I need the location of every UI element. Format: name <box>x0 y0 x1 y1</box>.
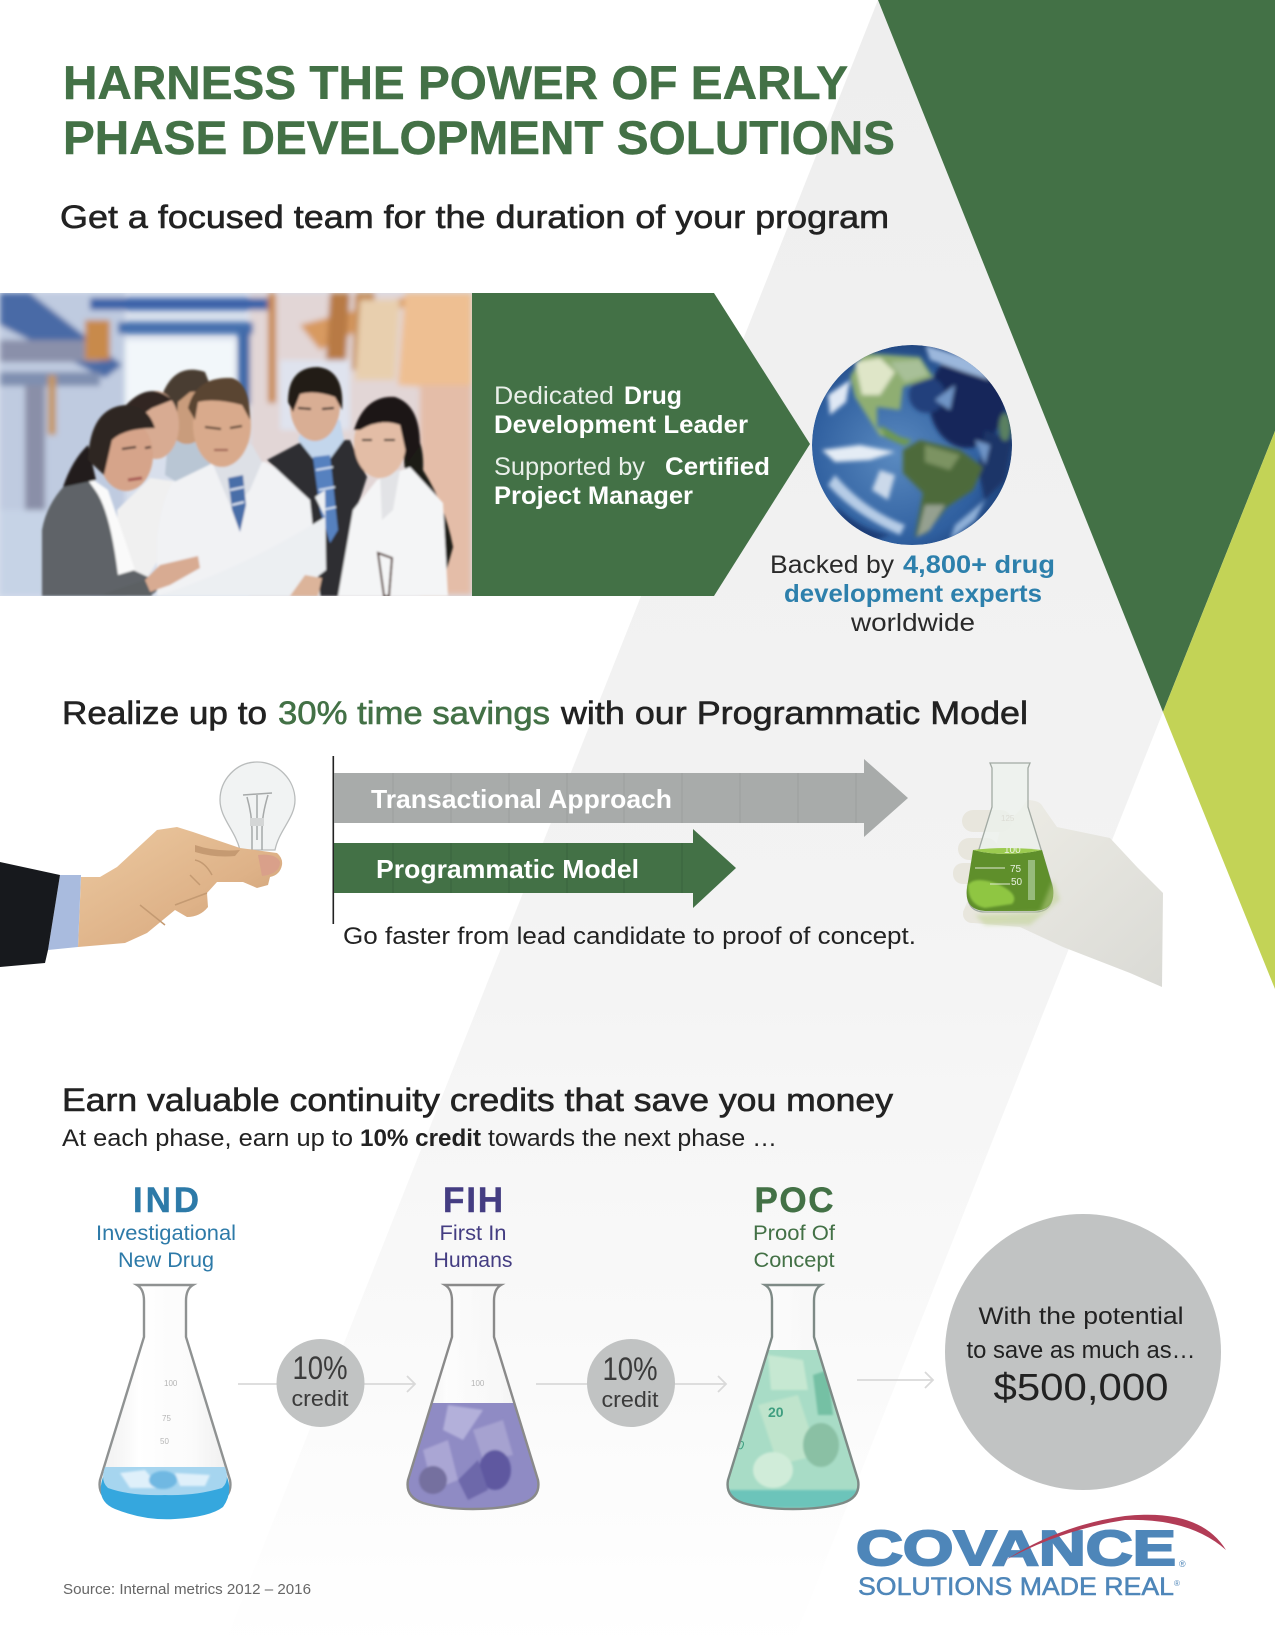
label: FIH: Humans <box>434 1249 512 1272</box>
flask markings: 100 <box>1004 845 1021 856</box>
badge: 10% credit: credit <box>292 1386 348 1411</box>
label: FIH: FIH <box>443 1181 503 1220</box>
heading: time savings: 30% time savings <box>278 695 550 731</box>
flask: POC teal: 20 <box>768 1404 784 1420</box>
arrow: FIH to POC <box>536 1376 726 1392</box>
flask: FIH purple: 100 <box>471 1379 485 1388</box>
green arrow shape <box>472 293 810 596</box>
logo: Covance: COVANCE <box>856 1522 1176 1576</box>
flask: FIH purple <box>403 1285 543 1509</box>
woman in gray suit <box>42 405 165 596</box>
label: FIH <box>434 1181 512 1272</box>
suit sleeve <box>0 862 60 967</box>
label: IND <box>96 1181 236 1272</box>
subheading: earn up to 10%: 10% credit <box>360 1125 481 1152</box>
callout: potential savings circle: $500,000 <box>994 1367 1168 1409</box>
callout: potential savings circle: With the potential <box>978 1303 1184 1330</box>
arrow: transactional approach <box>334 759 908 837</box>
subheading: earn up to 10% <box>62 1125 777 1152</box>
sleeve <box>142 579 152 596</box>
heading: continuity credits: Earn valuable continuity credits that save you money <box>62 1082 893 1118</box>
green glow on glove <box>975 880 1060 925</box>
logo: Covance: ® <box>1174 1579 1180 1588</box>
man in dark suit <box>267 367 367 596</box>
label: IND: Investigational <box>96 1222 236 1245</box>
flask: IND blue: 100 <box>164 1379 178 1388</box>
flask: POC teal <box>723 1285 863 1509</box>
caption: backed by experts: worldwide <box>850 609 975 637</box>
flask neck and body <box>967 763 1053 912</box>
badge: 10% credit: credit <box>602 1387 658 1412</box>
badge: 10% credit: 10% <box>602 1351 658 1387</box>
blueprint paper <box>311 489 328 578</box>
badge: 10% credit <box>587 1339 675 1427</box>
title <box>63 56 895 164</box>
flask markings <box>975 814 1023 888</box>
logo: Covance: SOLUTIONS MADE REAL <box>858 1573 1174 1601</box>
title: PHASE DEVELOPMENT SOLUTIONS <box>63 111 895 164</box>
label: FIH: First In <box>440 1222 506 1245</box>
arrow: POC to savings <box>857 1372 933 1388</box>
thumb nail <box>258 855 280 876</box>
label: POC <box>753 1181 835 1272</box>
image: gloved hand holding flask <box>953 763 1163 987</box>
caption: backed by experts: development experts <box>784 580 1042 608</box>
timeline axis <box>332 756 334 924</box>
man behind <box>162 370 212 490</box>
text: supported by certified project manager: Project Manager <box>494 482 693 510</box>
glove back of hand <box>963 800 1163 987</box>
callout: potential savings circle <box>945 1214 1221 1490</box>
caption: go faster: Go faster from lead candidate to proof of concept. <box>343 923 916 950</box>
thumb shadow <box>195 845 240 856</box>
green liquid <box>967 850 1053 911</box>
logo: Covance <box>856 1515 1226 1601</box>
flask markings: 75 <box>1010 864 1022 875</box>
badge: 10% credit <box>276 1339 364 1427</box>
callout: potential savings circle: to save as much as… <box>966 1337 1196 1364</box>
text: dedicated drug development leader: Drug <box>624 382 682 410</box>
title: HARNESS THE POWER OF EARLY <box>63 56 848 109</box>
hand creases <box>140 860 212 925</box>
heading: time savings <box>62 695 1028 731</box>
hand <box>78 827 282 947</box>
hand on paper <box>143 556 200 592</box>
source note: Source: Internal metrics 2012 – 2016 <box>63 1582 311 1598</box>
text: dedicated drug development leader: Dedicated <box>494 382 614 410</box>
woman behind <box>117 391 180 596</box>
heading: time savings: with our Programmatic Model <box>560 695 1028 731</box>
flask: IND blue: 50 <box>160 1437 169 1446</box>
label: POC: Proof Of <box>753 1222 835 1245</box>
logo: Covance: ® <box>1179 1559 1186 1569</box>
text: supported by certified project manager <box>494 453 770 510</box>
label: IND: IND <box>133 1181 199 1220</box>
text: dedicated drug development leader <box>494 382 748 439</box>
flask markings: 125 <box>1001 814 1015 823</box>
background: light gray diagonal band <box>222 0 1163 1650</box>
background: dark green triangle <box>878 0 1275 712</box>
arrow: programmatic model: Programmatic Model <box>376 854 639 884</box>
text: supported by certified project manager: Supported by <box>494 453 646 481</box>
caption: backed by experts: Backed by <box>770 551 895 579</box>
icon: earth globe <box>812 345 1012 545</box>
badge: 10% credit: 10% <box>292 1350 348 1386</box>
heading: time savings: Realize up to <box>62 695 267 731</box>
shirt cuff <box>48 875 81 950</box>
label: IND: New Drug <box>118 1249 214 1272</box>
fingers behind flask <box>953 810 1012 923</box>
flask: IND blue: 75 <box>162 1414 171 1423</box>
flask: POC teal: 00 <box>729 1435 747 1453</box>
panel: green arrow with team description <box>472 293 810 596</box>
image: hand holding light bulb <box>0 762 295 967</box>
arrow: transactional approach: Transactional Approach <box>371 784 672 814</box>
background: lime triangle <box>1163 431 1275 989</box>
flask: IND blue <box>100 1285 230 1519</box>
man in center lab coat <box>157 378 325 596</box>
subheading: earn up to 10%: towards the next phase … <box>488 1125 777 1152</box>
arrow: IND to FIH <box>238 1376 415 1392</box>
photo: team of scientists <box>0 293 472 596</box>
caption: backed by experts: 4,800+ drug <box>903 551 1055 579</box>
woman with white coat <box>338 397 453 596</box>
subtitle: Get a focused team for the duration of your program <box>60 199 889 235</box>
arrow: programmatic model <box>334 829 736 908</box>
label: POC: Concept <box>754 1249 835 1272</box>
bulb <box>220 762 295 850</box>
flask markings: 50 <box>1011 877 1023 888</box>
text: supported by certified project manager: Certified <box>665 453 770 481</box>
subheading: earn up to 10%: At each phase, earn up to <box>62 1125 353 1152</box>
label: POC: POC <box>754 1181 834 1220</box>
caption: backed by experts <box>770 551 1055 637</box>
text: dedicated drug development leader: Development Leader <box>494 411 748 439</box>
